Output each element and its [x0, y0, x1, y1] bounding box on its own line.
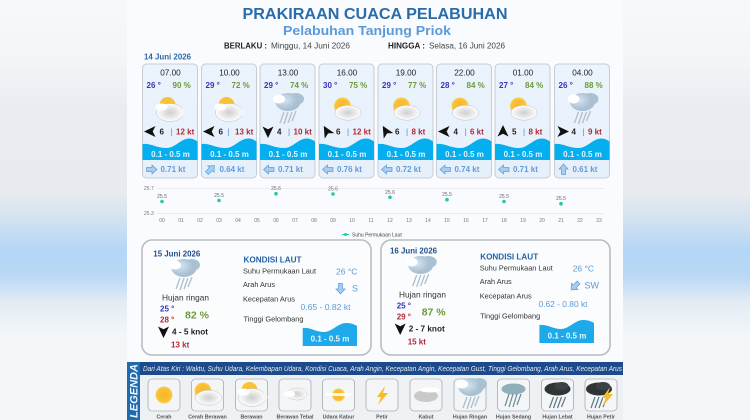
forecast card 22.00 — [436, 64, 492, 178]
forecast card 19.00 — [378, 64, 433, 178]
sea labels: Tinggi Gelombang — [244, 314, 304, 324]
y axis labels: 25.3 — [144, 211, 154, 217]
wind speed: 2 - 7 knot — [409, 324, 445, 334]
sea temperature: 26 °C — [336, 266, 357, 276]
validity period: HINGGA : — [388, 42, 425, 50]
forecast card 16.00: 30 ° — [323, 81, 337, 90]
icon: light rain — [406, 256, 437, 287]
forecast card 10.00: 72 % — [232, 81, 250, 90]
legend item: Berawan Tebal — [276, 379, 314, 420]
forecast card 01.00: 01.00 — [513, 68, 534, 78]
x axis hour labels: 20 — [539, 218, 545, 224]
forecast card 22.00: 4 — [454, 128, 458, 136]
data labels: 25.5 — [499, 194, 509, 200]
forecast card 22.00: | — [464, 128, 467, 136]
icon: light rain — [169, 259, 200, 290]
wave height: 0.1 - 0.5 m — [311, 334, 349, 344]
forecast card 13.00: 74 % — [290, 81, 308, 90]
forecast card 01.00: 5 — [512, 128, 517, 136]
forecast card 10.00: 13 kt — [235, 128, 254, 136]
panel date: 15 Juni 2026 — [153, 250, 201, 258]
forecast card 16.00: 0.1 - 0.5 m — [328, 150, 366, 159]
sea labels: Suhu Permukaan Laut — [243, 266, 317, 276]
sea surface temperature chart — [144, 186, 604, 238]
forecast card 04.00: 9 kt — [588, 128, 602, 136]
data labels: 25.6 — [271, 186, 281, 192]
data labels: 25.5 — [442, 192, 452, 198]
maximum temperature: 28 ° — [160, 316, 174, 324]
forecast card 04.00: 04.00 — [572, 68, 593, 78]
forecast card 01.00: | — [523, 128, 525, 136]
forecast card 04.00: 0.61 kt — [572, 165, 598, 174]
humidity: 82 % — [185, 310, 210, 322]
y axis labels — [144, 186, 154, 217]
x axis hour labels: 01 — [178, 218, 184, 224]
legend item: Kabut — [410, 379, 442, 420]
x axis hour labels: 06 — [273, 218, 279, 224]
x axis hour labels: 23 — [596, 218, 602, 224]
x axis hour labels: 18 — [501, 218, 507, 224]
x axis hour labels: 12 — [387, 218, 393, 224]
forecast card 13.00: 29 ° — [264, 81, 278, 90]
x axis hour labels: 14 — [425, 218, 431, 224]
current direction — [336, 284, 345, 294]
forecast card 13.00: | — [288, 128, 290, 136]
forecast card 22.00: 28 ° — [440, 81, 455, 90]
forecast card 07.00: | — [170, 128, 173, 136]
forecast card 04.00: 4 — [572, 128, 576, 136]
x axis hour labels: 09 — [330, 218, 336, 224]
forecast card 07.00: 90 % — [172, 81, 191, 90]
validity period: Selasa, 16 Juni 2026 — [429, 42, 506, 50]
forecast card 10.00: 10.00 — [219, 68, 240, 78]
forecast card 01.00: 8 kt — [528, 128, 543, 136]
forecast card 07.00: 07.00 — [160, 68, 181, 78]
forecast card 07.00: 0.71 kt — [160, 165, 186, 174]
sea labels: Kecepatan Arus — [243, 294, 295, 304]
x axis hour labels: 05 — [254, 218, 260, 224]
x axis hour labels: 22 — [577, 218, 583, 224]
data points — [160, 192, 563, 206]
legend item: Hujan Lebat — [542, 379, 574, 420]
forecast card 13.00 — [260, 64, 315, 178]
forecast card 07.00: 12 kt — [176, 128, 195, 136]
x axis hour labels: 08 — [311, 218, 317, 224]
forecast card 19.00: 6 — [395, 128, 400, 136]
legend item: Cerah Berawan — [188, 379, 227, 420]
legend item: Udara Kabur — [322, 379, 354, 420]
sea labels — [480, 264, 554, 320]
forecast card 22.00: 0.1 - 0.5 m — [445, 150, 484, 159]
forecast card 10.00: 0.1 - 0.5 m — [210, 150, 249, 159]
forecast card 16.00: 6 — [336, 128, 341, 136]
forecast card 10.00: 6 — [218, 128, 224, 136]
forecast card 19.00: | — [406, 128, 408, 136]
forecast card 10.00: 0.64 kt — [220, 165, 245, 174]
data labels: 25.6 — [385, 190, 395, 196]
legend — [127, 362, 623, 420]
wind direction — [395, 324, 406, 335]
forecast card 10.00: | — [228, 128, 230, 136]
legend item: Hujan Ringan — [453, 378, 487, 420]
minimum temperature: 25 ° — [397, 302, 411, 310]
data labels: 25.5 — [556, 196, 566, 202]
forecast card 22.00: 84 % — [466, 81, 485, 90]
forecast card 01.00: 0.1 - 0.5 m — [504, 150, 542, 159]
forecast card 19.00: 19.00 — [396, 68, 417, 78]
forecast card 04.00: 26 ° — [558, 81, 573, 90]
forecast card 19.00: 8 kt — [412, 128, 426, 136]
x axis hour labels: 00 — [159, 218, 165, 224]
forecast card 13.00: 10 kt — [294, 128, 312, 136]
sea temperature: 26 °C — [573, 264, 594, 274]
forecast card 07.00 — [142, 64, 198, 178]
panel: 16 Juni 2026 — [381, 240, 610, 355]
maximum temperature: 29 ° — [397, 312, 411, 322]
forecast card 22.00: 0.74 kt — [454, 165, 480, 174]
current direction — [568, 279, 582, 293]
forecast card 13.00: 0.71 kt — [278, 165, 303, 174]
forecast card 16.00: 0.76 kt — [337, 165, 362, 174]
legend side tab: LEGENDA — [128, 364, 140, 418]
data labels: 25.5 — [214, 193, 224, 199]
forecast card 13.00: 0.1 - 0.5 m — [269, 150, 307, 159]
data labels — [157, 186, 566, 202]
legend header bar: Dari Atas Kiri : Waktu, Suhu Udara, Kelembapan Udara, Kondisi Cuaca, Arah Angin, Kecepatan Angin, Kecepatan Gust, Tinggi Gelombang, Arah Arus, Kecepatan Arus — [143, 366, 622, 373]
forecast card 16.00: 16.00 — [337, 68, 358, 78]
sea condition heading: KONDISI LAUT — [480, 252, 539, 262]
wave height: 0.1 - 0.5 m — [548, 332, 586, 340]
sea labels — [243, 266, 317, 324]
forecast card 19.00: 0.1 - 0.5 m — [387, 150, 425, 159]
forecast card 01.00: 0.71 kt — [513, 165, 538, 174]
legend item: Berawan — [236, 379, 268, 420]
wind direction — [158, 326, 169, 338]
wind speed: 4 - 5 knot — [172, 326, 208, 336]
forecast card 22.00: 6 kt — [470, 128, 484, 136]
center sheet — [127, 0, 623, 420]
sea labels: Arah Arus — [480, 277, 512, 286]
y axis labels: 25.7 — [144, 186, 154, 192]
gust: 13 kt — [171, 340, 190, 350]
forecast card 19.00: 77 % — [408, 81, 426, 90]
x axis hour labels: 04 — [235, 218, 241, 224]
x axis hour labels: 15 — [444, 218, 450, 224]
data labels: 25.6 — [328, 186, 338, 192]
panel: 15 Juni 2026 — [142, 240, 371, 355]
validity period: BERLAKU : — [224, 42, 267, 50]
sea condition heading: KONDISI LAUT — [244, 254, 302, 264]
forecast card 10.00 — [202, 64, 256, 178]
sea labels: Kecepatan Arus — [480, 292, 532, 300]
panel: 16 Juni 2026: SW — [584, 280, 600, 290]
minimum temperature: 25 ° — [160, 304, 174, 314]
forecast card 16.00 — [319, 64, 374, 178]
condition: Hujan ringan — [162, 292, 209, 302]
gust: 15 kt — [408, 338, 426, 346]
current speed: 0.65 - 0.82 kt — [300, 303, 351, 312]
forecast card 13.00: 13.00 — [278, 68, 299, 78]
x axis hour labels: 16 — [463, 218, 469, 224]
forecast card 07.00: 0.1 - 0.5 m — [151, 150, 190, 159]
forecast card 16.00: 75 % — [349, 81, 367, 90]
x axis hour labels — [159, 218, 602, 224]
title: PRAKIRAAN CUACA PELABUHAN — [242, 6, 508, 23]
validity period — [224, 42, 506, 50]
x axis hour labels: 03 — [216, 218, 222, 224]
x axis hour labels: 07 — [292, 218, 298, 224]
forecast card 04.00: | — [582, 128, 585, 136]
forecast card 07.00: 26 ° — [146, 81, 161, 90]
wave height — [303, 323, 357, 346]
x axis hour labels: 17 — [482, 218, 488, 224]
legend header bar — [140, 362, 623, 375]
subtitle: Pelabuhan Tanjung Priok — [283, 23, 452, 38]
legend item: Petir — [366, 379, 398, 420]
legend item: Cerah — [148, 379, 180, 420]
forecast card 01.00 — [495, 64, 550, 178]
forecast card 22.00: 22.00 — [454, 68, 475, 78]
panel date: 16 Juni 2026 — [390, 246, 438, 256]
forecast card 19.00: 29 ° — [382, 81, 396, 90]
sea labels: Suhu Permukaan Laut — [480, 264, 554, 272]
forecast card 04.00: 0.1 - 0.5 m — [563, 150, 602, 159]
panel: 15 Juni 2026: S — [352, 284, 358, 294]
x axis hour labels: 13 — [406, 218, 412, 224]
x axis hour labels: 10 — [349, 218, 355, 224]
x axis hour labels: 11 — [368, 218, 374, 224]
forecast card 16.00: | — [347, 128, 349, 136]
forecast card 19.00: 0.72 kt — [396, 165, 421, 174]
humidity: 87 % — [422, 306, 446, 318]
current speed: 0.62 - 0.80 kt — [538, 300, 588, 309]
forecast card 01.00: 84 % — [525, 81, 543, 90]
forecast card 13.00: 4 — [277, 128, 282, 136]
date heading: 14 Juni 2026 — [144, 52, 191, 62]
x axis hour labels: 19 — [520, 218, 526, 224]
sea labels: Tinggi Gelombang — [480, 312, 540, 320]
wave height — [539, 320, 594, 343]
forecast card 04.00: 88 % — [584, 81, 603, 90]
legend item: Hujan Petir — [585, 379, 617, 420]
condition: Hujan ringan — [399, 290, 446, 300]
forecast card 16.00: 12 kt — [352, 128, 371, 136]
sea labels: Arah Arus — [243, 280, 275, 289]
forecast card 10.00: 29 ° — [206, 81, 220, 90]
chart legend: Suhu Permukaan Laut — [352, 232, 402, 238]
x axis hour labels: 02 — [197, 218, 203, 224]
forecast card 01.00: 27 ° — [499, 81, 513, 90]
forecast card 04.00 — [554, 64, 610, 178]
data labels: 25.5 — [157, 194, 167, 200]
x axis hour labels: 21 — [558, 218, 564, 224]
forecast card 07.00: 6 — [160, 128, 164, 136]
legend item: Hujan Sedang — [496, 379, 531, 420]
validity period: Minggu, 14 Juni 2026 — [271, 42, 351, 50]
